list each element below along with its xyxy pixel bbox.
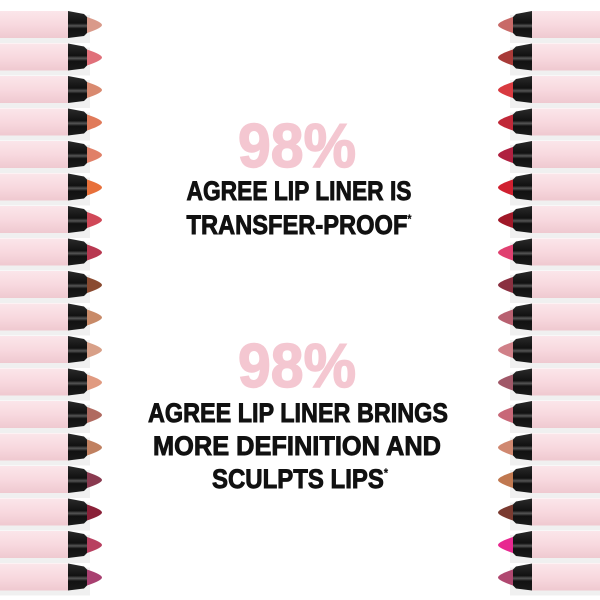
stat 1 caption: * xyxy=(407,212,412,226)
stat 2 caption xyxy=(148,398,448,494)
stat 2: 98%: 98% xyxy=(238,332,356,401)
stat 2 caption: * xyxy=(384,466,388,480)
stat 1 caption xyxy=(186,176,412,240)
stat 2 caption: MORE DEFINITION AND xyxy=(153,431,441,461)
stat 2 caption: SCULPTS LIPS xyxy=(212,464,406,494)
right pencils column xyxy=(498,11,600,596)
stat 2 caption: AGREE LIP LINER BRINGS xyxy=(148,398,448,428)
stat 1: 98%: 98% xyxy=(238,112,356,181)
stat 1 caption: AGREE LIP LINER IS xyxy=(186,176,412,206)
left pencils column xyxy=(0,11,102,596)
stat 1 caption: TRANSFER-PROOF xyxy=(186,210,438,240)
